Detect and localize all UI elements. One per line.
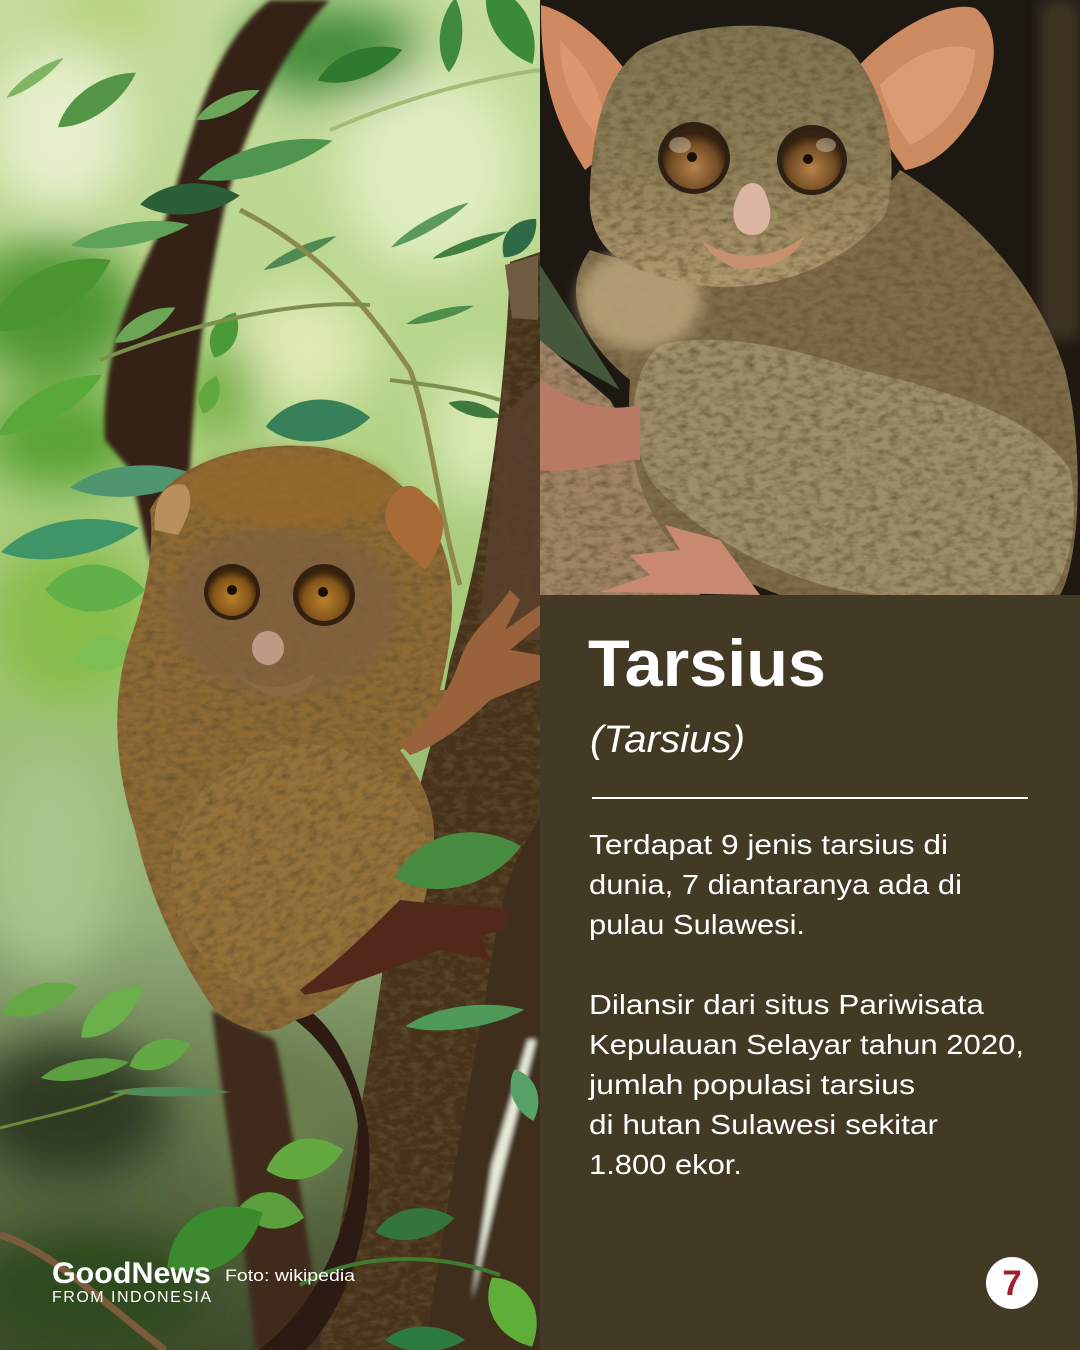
- page number badge: 7: [1002, 1264, 1022, 1303]
- tarsier ears: [541, 5, 994, 170]
- scientific name: (Tarsius): [590, 719, 745, 761]
- text panel: [540, 595, 1080, 1350]
- dark background post: [1040, 0, 1080, 340]
- logo: GoodNews from Indonesia: GoodNews: [52, 1257, 211, 1290]
- foreground twigs: [0, 1090, 500, 1350]
- tarsier tail: [265, 1010, 366, 1350]
- logo: GoodNews from Indonesia: [52, 1257, 211, 1306]
- photo credit: Foto: wikipedia: [225, 1266, 356, 1285]
- leaves, upper canopy: [0, 0, 549, 677]
- page number badge: [986, 1257, 1038, 1309]
- tarsier body: [576, 170, 1078, 595]
- left photo: tarsier clinging to a tree: [0, 0, 560, 1350]
- branch under the tarsier: [540, 265, 700, 595]
- tarsier hands and foot: [300, 590, 540, 995]
- paragraph 2: [588, 989, 1024, 1180]
- tarsier thigh: [634, 340, 1074, 595]
- title: Tarsius: [588, 626, 826, 700]
- tarsier eyes: [658, 122, 847, 195]
- tarsier eyes: [204, 564, 355, 626]
- background tree branches: [104, 0, 560, 1350]
- tarsier body: [117, 446, 471, 1038]
- tarsier nose and mouth: [235, 631, 315, 697]
- paragraph 2: Dilansir dari situs Pariwisata: [589, 989, 984, 1020]
- tarsier hand and foot: [540, 380, 760, 595]
- right photo: tarsier close-up: [540, 0, 1080, 595]
- blurred forest background: [0, 0, 525, 1350]
- tarsier chest: [578, 250, 702, 350]
- logo: GoodNews from Indonesia: FROM INDONESIA: [52, 1289, 211, 1306]
- foreground leaves: [0, 819, 551, 1350]
- paragraph 1: dunia, 7 diantaranya ada di: [589, 869, 962, 900]
- paragraph 1: Terdapat 9 jenis tarsius di: [589, 829, 948, 860]
- thin twigs: [100, 70, 540, 585]
- tarsier ears: [155, 484, 443, 570]
- paragraph 2: 1.800 ekor.: [589, 1149, 742, 1180]
- tarsier head: [590, 26, 892, 287]
- paragraph 1: pulau Sulawesi.: [589, 909, 805, 940]
- paragraph 2: Kepulauan Selayar tahun 2020,: [589, 1029, 1024, 1060]
- paragraph 2: jumlah populasi tarsius: [588, 1069, 915, 1100]
- divider: [592, 797, 1028, 799]
- tarsier nose and mouth: [700, 183, 805, 269]
- main tree trunk: [318, 252, 540, 1350]
- paragraph 1: [589, 829, 962, 940]
- paragraph 2: di hutan Sulawesi sekitar: [589, 1109, 938, 1140]
